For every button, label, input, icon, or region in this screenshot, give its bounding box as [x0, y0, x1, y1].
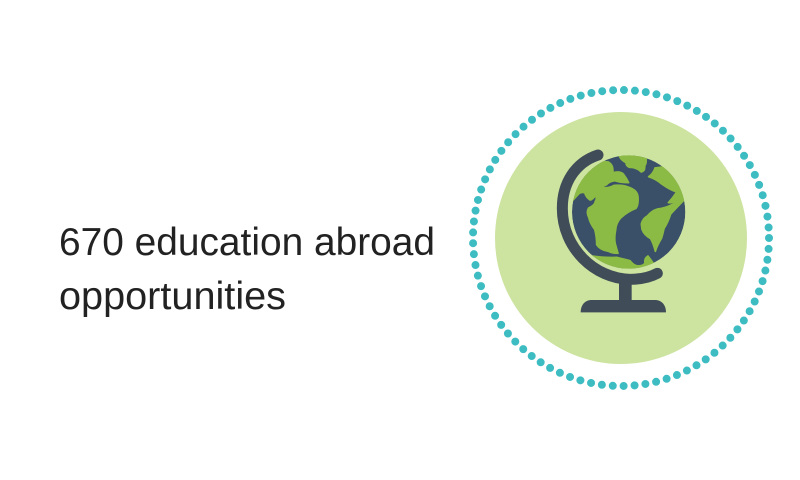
- stem: [619, 280, 632, 302]
- text: 670 education abroad opportunities: opportunities: [59, 275, 286, 318]
- base: [581, 300, 666, 312]
- dotted teal ring: [473, 90, 769, 386]
- text: 670 education abroad opportunities: 670 education abroad: [59, 221, 435, 264]
- globe sphere: [570, 153, 687, 273]
- stand arc: [562, 155, 657, 279]
- light green circle: [495, 112, 747, 364]
- land masses: [570, 153, 687, 273]
- icon: globe on stand: [562, 153, 687, 312]
- text: 670 education abroad opportunities: [59, 221, 435, 318]
